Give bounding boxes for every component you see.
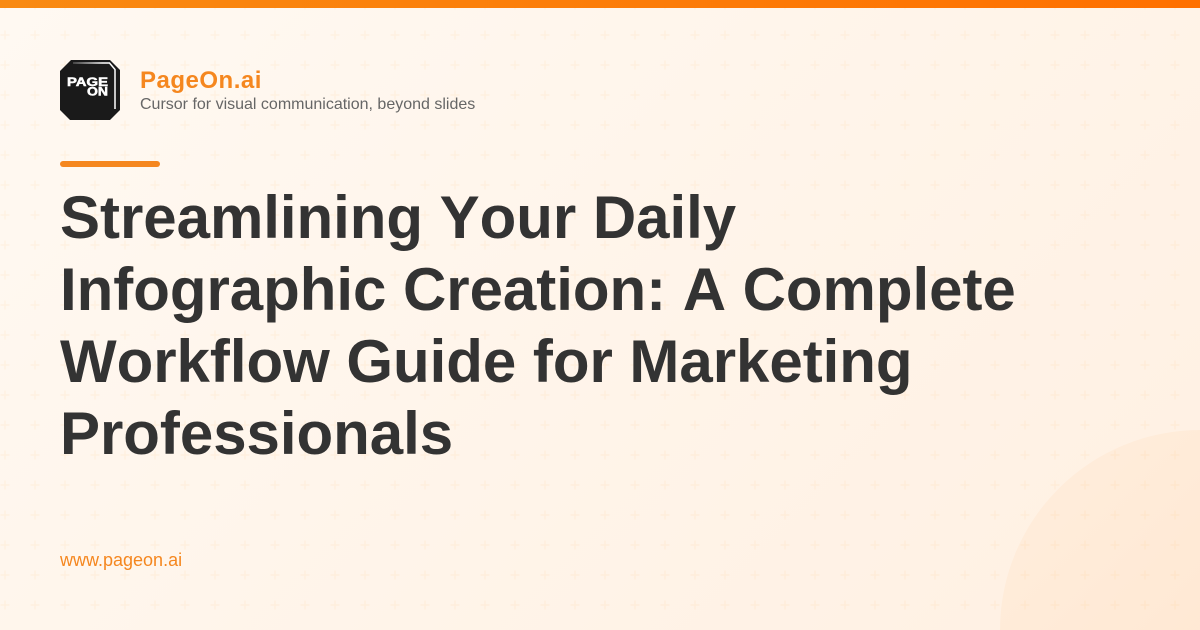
accent divider xyxy=(60,161,160,167)
title: Professionals xyxy=(60,400,453,467)
title: Workflow Guide for Marketing xyxy=(60,328,913,395)
logo icon: ON xyxy=(87,87,108,99)
top accent bar xyxy=(0,0,1200,8)
tagline: Cursor for visual communication, beyond slides xyxy=(140,96,475,113)
logo icon: PAGE xyxy=(67,77,108,89)
title xyxy=(60,184,1016,467)
title: Streamlining Your Daily xyxy=(60,184,736,251)
website url: www.pageon.ai xyxy=(60,550,182,570)
title: Infographic Creation: A Complete xyxy=(60,256,1016,323)
logo icon xyxy=(60,60,120,120)
decorative corner circle xyxy=(1000,430,1200,630)
brand name: PageOn.ai xyxy=(140,67,262,94)
